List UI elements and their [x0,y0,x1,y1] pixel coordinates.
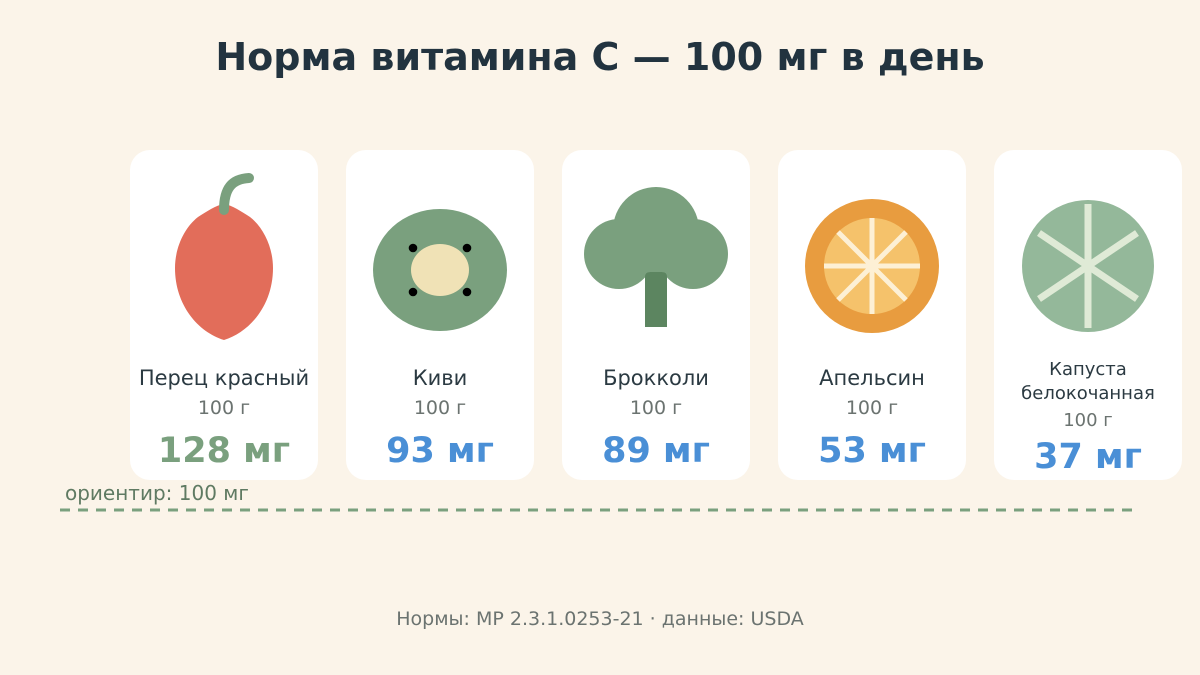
panel: cabbage [994,150,1182,480]
label: broccoli name: Брокколи [603,366,709,390]
label: kiwi name: Киви [413,366,467,390]
label: cabbage name: Капуста [1049,359,1127,380]
icon: kiwi [373,209,507,331]
reference label: ориентир: 100 мг [65,481,249,505]
title: Норма витамина C — 100 мг в день [215,35,985,79]
value: kiwi: 93 мг [386,431,494,471]
icon: broccoli [584,187,728,327]
label: cabbage weight: 100 г [1063,410,1113,431]
panel: kiwi [346,150,534,480]
panel: red pepper [130,150,318,480]
icon: cabbage [1022,200,1154,332]
footer source: Нормы: МР 2.3.1.0253-21 · данные: USDA [396,608,804,630]
label: orange name: Апельсин [819,366,925,390]
value: pepper: 128 мг [158,431,290,471]
label: cabbage name: белокочанная [1021,383,1155,404]
label: pepper weight: 100 г [198,397,250,419]
label: orange weight: 100 г [846,397,898,419]
label: kiwi weight: 100 г [414,397,466,419]
value: cabbage: 37 мг [1034,437,1142,477]
value: orange: 53 мг [818,431,926,471]
icon: orange [805,199,939,333]
icon: red pepper [175,178,273,340]
label: pepper name: Перец красный [139,366,309,390]
reference line: 100 mg [60,508,1132,512]
panel: broccoli [562,150,750,480]
label: broccoli weight: 100 г [630,397,682,419]
value: broccoli: 89 мг [602,431,710,471]
panel: orange [778,150,966,480]
